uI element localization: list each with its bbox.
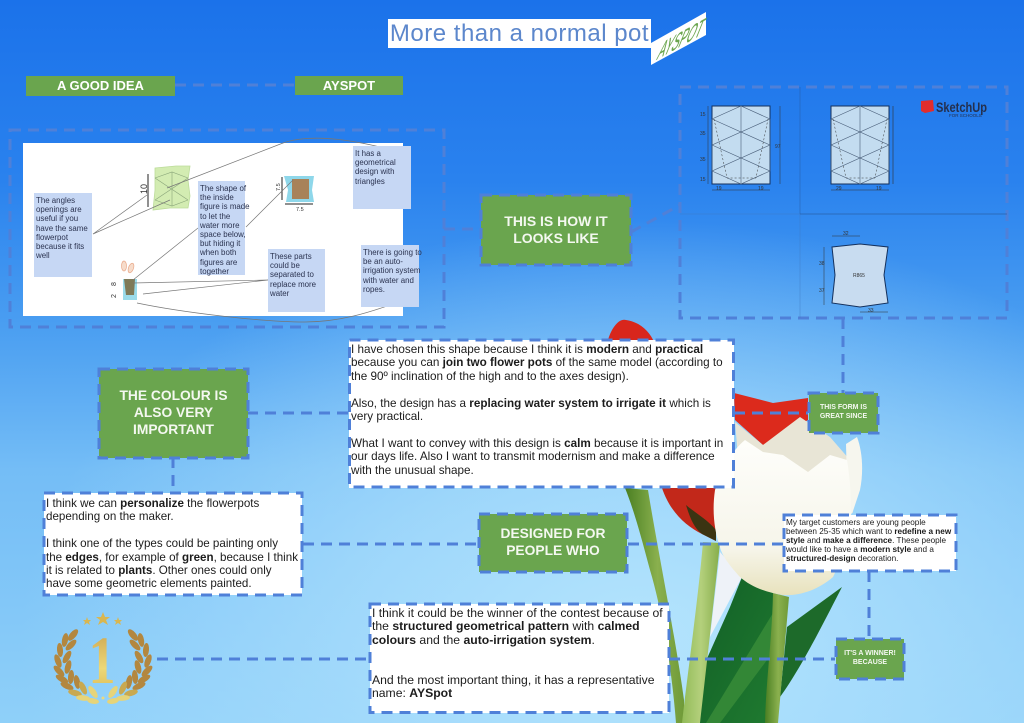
text block: contest winner: colours and the auto-irrigation system.	[372, 633, 595, 647]
drawing: pot side view right: 19	[876, 186, 882, 192]
callout: inside shape: water more	[200, 221, 239, 230]
heading: this is how it looks like: LOOKS LIKE	[513, 230, 599, 246]
callout: angles: because it fits	[36, 242, 84, 251]
callout: geometrical design: triangles	[355, 177, 385, 186]
drawing: pot top view: 37	[819, 288, 825, 294]
callout: inside shape: The shape of	[200, 184, 246, 193]
drawing: pot top view: 32	[843, 231, 849, 237]
callout: inside shape: to let the	[200, 212, 230, 221]
icon: green pot sketch	[139, 166, 190, 210]
callout: inside shape	[198, 181, 245, 275]
text block: personalize: I think one of the types could be painting only	[46, 537, 278, 550]
callout: angles: well	[36, 251, 50, 260]
callout: inside shape: the inside	[200, 193, 234, 202]
callout: separated parts: separated to	[270, 270, 314, 279]
text block: contest winner: And the most important thing, it has a representative	[372, 673, 654, 687]
heading: designed for people who: PEOPLE WHO	[506, 543, 600, 558]
callout: auto-irrigation: ropes.	[363, 285, 385, 294]
icon: gold laurel medal number 1: 1	[88, 623, 116, 698]
heading: this form is great since: THIS FORM IS	[820, 404, 867, 411]
drawing: pot top view	[819, 231, 888, 314]
text block: why this shape: because you can join two flower pots of the same model (according to	[351, 356, 723, 369]
drawing: pot side view right: 29	[836, 186, 842, 192]
callout: inside shape: figure is made	[200, 202, 250, 211]
heading: the colour is also very important: ALSO VERY	[134, 405, 213, 420]
callout: angles: have the same	[36, 224, 88, 233]
drawing: pot side view left: 15	[700, 112, 706, 118]
text block: why this shape: Also, the design has a replacing water system to irrigate it which is	[351, 397, 711, 410]
callout: geometrical design: geometrical	[355, 158, 396, 167]
heading: this is how it looks like	[481, 195, 631, 265]
callout: auto-irrigation: There is going to	[363, 248, 422, 257]
text block: personalize: the edges, for example of green, because I think	[46, 551, 298, 564]
heading: ayspot	[295, 76, 403, 95]
logo: SketchUp: SketchUp	[936, 100, 987, 115]
text block: why this shape: the 90º inclination of the high and to the axes design).	[351, 370, 629, 383]
drawing: pot side view left: 15	[700, 177, 706, 183]
callout: separated parts: These parts	[270, 252, 312, 261]
heading: designed for people who: DESIGNED FOR	[500, 526, 606, 541]
heading: it's a winner because	[836, 639, 904, 679]
heading: the colour is also very important: IMPORTANT	[133, 422, 214, 437]
callout: geometrical design: design with	[355, 167, 394, 176]
text block: why this shape: our days life. Also I want to transmit modernism and make a difference	[351, 450, 715, 463]
text block: target customers: structured-design decoration.	[786, 554, 898, 563]
text block: personalize: depending on the maker.	[46, 510, 174, 523]
icon: green pot sketch: 10	[139, 184, 149, 194]
drawing: pot side view left: 97	[775, 144, 781, 150]
drawing: pot side view left: 19	[758, 186, 764, 192]
text block: why this shape: very practical.	[351, 410, 423, 423]
text block: why this shape: What I want to convey with this design is calm because it is important in	[351, 437, 723, 450]
heading: it's a winner because: BECAUSE	[853, 659, 887, 666]
text block: target customers	[784, 515, 956, 571]
callout: inside shape: when both	[200, 248, 236, 257]
panel: annotated sketch sheet	[23, 143, 403, 316]
drawing: pot side view right	[831, 106, 893, 192]
callout: geometrical design: It has a	[355, 149, 381, 158]
callout: auto-irrigation: be an auto-	[363, 257, 403, 266]
callout: inside shape: but hiding it	[200, 239, 240, 248]
drawing: pot top view: 33	[868, 308, 874, 314]
text block: contest winner: I think it could be the winner of the contest because of	[372, 606, 663, 620]
icon: gold laurel medal number 1	[54, 612, 152, 704]
callout: inside shape: space below,	[200, 230, 246, 239]
callout: auto-irrigation: with water and	[363, 276, 414, 285]
callout: inside shape: figures are	[200, 258, 237, 267]
drawing: pot side view left: 35	[700, 157, 706, 163]
text block: why this shape	[349, 340, 734, 488]
heading: a good idea	[26, 76, 175, 96]
text block: target customers: style and make a difference. These people	[786, 536, 946, 545]
text block: personalize: have some geometric elements painted.	[46, 577, 252, 590]
text block: why this shape: I have chosen this shape because I think it is modern and practical	[351, 343, 703, 356]
logo: SketchUp	[921, 100, 987, 118]
drawing: pot side view left: 19	[716, 186, 722, 192]
callout: angles: flowerpot	[36, 233, 68, 242]
drawing: pot top view: 38	[819, 261, 825, 267]
callout: angles: openings are	[36, 205, 82, 214]
heading: a good idea: A GOOD IDEA	[57, 78, 144, 93]
callout: angles: useful if you	[36, 214, 78, 223]
heading: this form is great since	[809, 393, 878, 433]
heading: designed for people who	[479, 514, 627, 572]
text block: why this shape: with the unusual shape.	[351, 464, 474, 477]
text block: personalize: I think we can personalize the flowerpots	[46, 497, 259, 510]
icon: small flower pot sketch: 8	[111, 282, 118, 286]
drawing: pot side view left: 35	[700, 131, 706, 137]
heading: this form is great since: GREAT SINCE	[820, 413, 867, 420]
text block: personalize	[44, 493, 302, 595]
icon: small flower pot sketch: 2	[111, 294, 118, 298]
drawing: pot side view left	[700, 106, 781, 192]
text block: target customers: My target customers are young people	[786, 518, 926, 527]
callout: geometrical design	[353, 146, 411, 209]
icon: brown inner shape sketch	[276, 176, 314, 213]
callout: inside shape: together	[200, 267, 229, 276]
icon: brown inner shape sketch: 7.5	[276, 183, 282, 191]
heading: it's a winner because: IT'S A WINNER!	[844, 650, 896, 657]
callout: separated parts: replace more	[270, 280, 316, 289]
text block: contest winner	[370, 604, 669, 713]
icon: small flower pot sketch	[111, 261, 137, 300]
logo: SketchUp: FOR SCHOOLS	[949, 113, 982, 118]
callout: auto-irrigation: irrigation system	[363, 266, 420, 275]
callout: auto-irrigation	[361, 245, 419, 307]
title: More than a normal pot	[390, 20, 649, 47]
callout: separated parts	[268, 249, 325, 312]
text block: contest winner: name: AYSpot	[372, 686, 452, 700]
text block: target customers: would like to have a modern style and a	[786, 545, 934, 554]
text block: contest winner: the structured geometrical pattern with calmed	[372, 619, 640, 633]
callout: separated parts: could be	[270, 261, 300, 270]
icon: brown inner shape sketch: 7.5	[296, 207, 304, 213]
callout: angles	[34, 193, 92, 277]
heading: the colour is also very important: THE COLOUR IS	[119, 388, 228, 403]
heading: this is how it looks like: THIS IS HOW IT	[504, 213, 608, 229]
heading: the colour is also very important	[99, 369, 248, 458]
callout: separated parts: water	[270, 289, 289, 298]
callout: angles: The angles	[36, 196, 75, 205]
text block: target customers: between 25-35 which want to redefine a new	[786, 527, 951, 536]
heading: ayspot: AYSPOT	[323, 78, 375, 93]
text block: personalize: it is related to plants. Other ones could only	[46, 564, 272, 577]
drawing: pot top view: R865	[853, 273, 865, 279]
